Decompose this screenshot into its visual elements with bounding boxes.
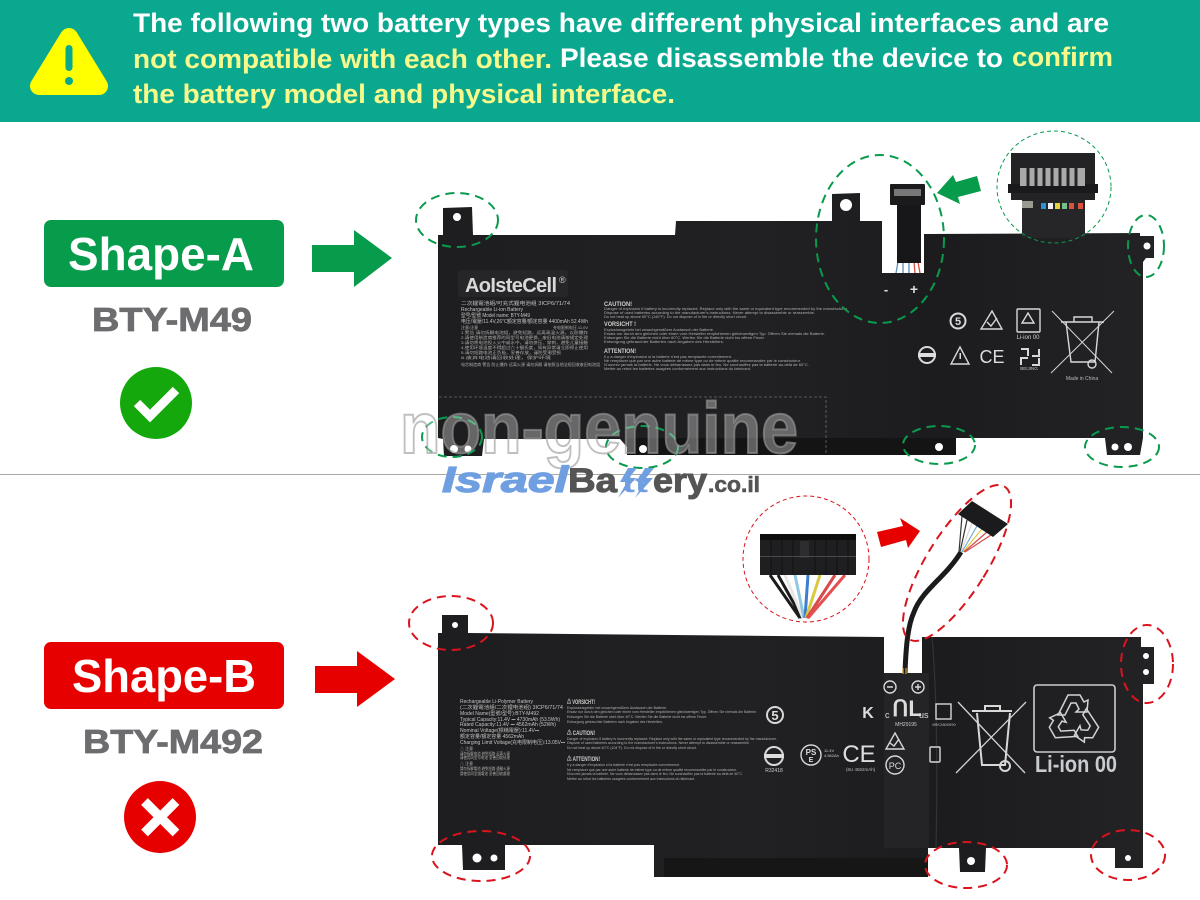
label text: safety warnings: Il y a danger d'explosion si la batterie n'est pas remplacée correctement. — [567, 762, 680, 767]
label text: specifications: Model Name(型號/型号):BTY-M492 — [460, 710, 539, 717]
panel: shape A labels — [44, 220, 392, 439]
label text: Chinese specifications: 4.使用环境温度不得超过六十摄氏度，如有异常请立即停止使用 — [461, 344, 588, 350]
label text: safety warnings: Entsorgung gebrauchter Batterien nach Angaben des Herstellers. — [567, 719, 663, 724]
label text: safety warnings: Ne remplacer que par une autre batterie de même type ou de même qualité recommandée par le constructeur. — [604, 358, 801, 363]
label text: safety warnings: Mettre au rebut les batteries usagées conformément aux instructions du fabricant. — [567, 776, 695, 781]
label text: Chinese specifications — [461, 300, 600, 367]
arrow: red pointer to connector B — [877, 518, 920, 548]
label text: Chinese specifications: 注意/注意 — [461, 324, 478, 330]
watermark: non-genuine: non-genuine — [400, 389, 798, 469]
warning text: The following two battery types have different physical interfaces and are — [133, 8, 1109, 38]
label text: specifications: 請勿拆解電池 避免短路 遠離火源 — [460, 765, 510, 771]
polarity marks: + — [910, 281, 918, 297]
label text: safety warnings: ATTENTION! — [604, 349, 636, 355]
label text: safety warnings: Ersatz nur durch den gleichen oder einen vom Hersteller empfohlenen gleichwertigen Typ. Öffnen Sie niemals die Batterie. — [567, 709, 757, 714]
label text: safety warnings: Ne remplacer que par une autre batterie de même type ou de même qualité recommandée par le constructeur. — [567, 767, 737, 772]
icon group: certification marks: PS — [806, 748, 817, 757]
arrow: green pointer to connector A — [937, 175, 981, 204]
label text: safety warnings — [567, 699, 777, 781]
label text: specifications: (二次鋰電池組/二次锂电池组) 3ICP6/71/74 — [460, 704, 563, 711]
label text: specifications: 請使用同型號電池 妥善回收處理 — [460, 770, 510, 776]
label text: specifications — [460, 699, 565, 776]
label text: safety warnings: Entsorgung gebrauchter Batterien nach Angaben des Herstellers. — [604, 339, 724, 344]
label text: safety warnings: Explosionsgefahr bei unsachgemäßem Austausch der Batterie. — [604, 327, 714, 332]
label text: specifications: 额定容量/額定容量 4562mAh — [460, 733, 524, 740]
label text: specifications: 请使用同型号电池 妥善回收处理 — [460, 754, 510, 760]
label text: safety warnings: Il y a danger d'explosion si la batterie n'est pas remplacée correctement. — [604, 354, 732, 359]
icon: warning triangle — [39, 37, 99, 86]
label text: safety warnings: VORSICHT ! — [604, 322, 636, 328]
model: BTY-M492: BTY-M492 — [83, 723, 263, 760]
icon: crossed-out recycle bin — [1051, 311, 1114, 382]
label text: specifications: Typical Capacity:11.4V ⎓ 4730mAh (53.5Wh) — [460, 717, 560, 723]
label text: safety warnings: Danger of explosion if battery is incorrectly replaced. Replace only with the same or equivalent type recommended by the manufacturer. — [604, 306, 848, 311]
label text: specifications: Rated Capacity:11.4V ⎓ 4562mAh (52Wh) — [460, 722, 556, 728]
icon group: certification marks: PC — [889, 761, 902, 771]
logo: AoisteCell: AoIsteCell — [465, 275, 557, 297]
icon group: certification marks: CE — [842, 741, 876, 768]
panel: battery A — [438, 184, 1154, 456]
divider — [0, 474, 1200, 475]
label text: safety warnings: Do not heat up above 60°C (140°F). Do not dispose of in fire or directly short circuit. — [604, 314, 747, 319]
callout: connector B close-up — [743, 496, 869, 622]
label text: Chinese specifications: 5.请勿短路电池正负极，妥善存放，谨防受潮受损 — [461, 349, 561, 355]
label text: specifications: Charging Limit Voltage(充电限制电压):13.05V⎓ — [460, 739, 565, 746]
icon: crossed-out recycle bin: Made in China — [1066, 376, 1098, 382]
label text: safety warnings: Explosionsgefahr bei unsachgemäßem Austausch der Batterie. — [567, 705, 667, 710]
label text: safety warnings: N'ouvrez jamais la batterie. Ne vous débarrassez pas dans le feu. Ne surchauffez pas la batterie au-delà de 60°C. — [604, 362, 809, 367]
label text: Chinese specifications: 电压/電壓/11.4V,26℃额定容量/额定容量 4400mAh 52.4Wh — [461, 318, 588, 325]
model: BTY-M49: BTY-M49 — [92, 301, 252, 338]
panel: battery B — [438, 615, 1154, 877]
label text: safety warnings: ⚠ VORSICHT! — [567, 699, 595, 706]
icon group: certification marks: 5 — [771, 708, 779, 723]
highlight ellipses: battery A — [416, 155, 1164, 468]
watermark: IsraelBattery.co.il: Ba — [568, 462, 618, 500]
label text: Chinese specifications: 1.警告 请勿拆解电池组，避免短路，远离高温火源，以防爆炸 — [461, 329, 588, 335]
warning text: Please disassemble the device to — [560, 43, 1003, 73]
label text: safety warnings: Entsorgen Sie die Batterie nicht über 40°C. Werfen Sie die Batterie nicht ins offene Feuer. — [567, 714, 707, 719]
label text: safety warnings: N'ouvrez jamais la batterie. Ne vous débarrassez pas dans le feu. Ne surchauffez pas la batterie au-delà de 40°C. — [567, 771, 743, 776]
badge: Shape-A: Shape-A — [68, 228, 254, 280]
label text: specifications: Rechargeable Li-Polymer Battery — [460, 699, 533, 705]
polarity marks: - — [884, 282, 888, 297]
label text: safety warnings — [604, 302, 848, 371]
label text: Chinese specifications: 电芯制造商 警告 防止爆炸 远离火源 请勿拆解 请依照当地法规回收废旧电池组 — [461, 361, 600, 367]
label text: safety warnings: ⚠ CAUTION! — [567, 730, 595, 737]
icon group: certification marks: us — [919, 710, 929, 720]
badge: Shape-B: Shape-B — [72, 650, 256, 702]
label text: Chinese specifications: 6.废弃电池请回收处理，保护环境 — [461, 354, 551, 360]
battery B body — [438, 615, 1154, 877]
label text: safety warnings: Dispose of used batteries according to the manufacturer's instructions. Never attempt to disassemble or reassemble. — [567, 740, 750, 745]
cable and connector A — [890, 184, 925, 273]
warning text — [133, 8, 1113, 109]
label text: Chinese specifications: 充电限制电压 11.0V — [553, 324, 588, 330]
icon group: certification marks: 5 — [955, 316, 961, 328]
label text: Chinese specifications: Rechargeable Li-ion Battery — [461, 307, 523, 313]
callout: connector A close-up — [997, 131, 1111, 243]
label text: safety warnings: CAUTION! — [604, 302, 632, 308]
watermark: IsraelBattery.co.il: Israel — [442, 459, 569, 500]
icon group: certification marks: (6U 4562mAh) — [846, 767, 876, 772]
icon: check mark — [120, 367, 192, 439]
icon group: certification marks: K — [862, 705, 874, 722]
icon group: certification marks: R32418 — [765, 768, 783, 774]
icon: recycling symbol box — [1034, 685, 1115, 752]
label text: safety warnings: ⚠ ATTENTION! — [567, 756, 600, 763]
badge: Shape-A — [44, 220, 284, 287]
label text: safety warnings: Dispose of used batteries according to the manufacturer's instructions. Never attempt to disassemble or reassemble. — [604, 310, 815, 315]
warning text: the battery model and physical interface. — [133, 79, 675, 109]
polarity marks — [884, 281, 918, 297]
cable and connector B — [903, 501, 1008, 674]
label text: Chinese specifications: 3.请勿将电池投入火中或水中，请勿挤压、穿刺，避免儿童接触 — [461, 339, 588, 345]
label text: specifications: Nominal Voltage(標稱電壓):11.4V⎓ — [460, 727, 539, 734]
watermark: IsraelBattery.co.il: .co.il — [708, 472, 760, 497]
label text: safety warnings: Mettre au rebut les batteries usagées conformément aux instructions du fabricant. — [604, 366, 751, 371]
watermark: IsraelBattery.co.il — [442, 459, 760, 500]
icon group: certification marks: BEIJING — [1020, 366, 1038, 371]
label text: specifications: △ 注意 — [460, 760, 473, 766]
watermark: IsraelBattery.co.il: tt — [622, 468, 648, 498]
icon group: certification marks: MH29195 — [895, 722, 917, 728]
label: Li-ion 00: Li-ion 00 — [1035, 751, 1117, 777]
label text: safety warnings: Danger of explosion if battery is incorrectly replaced. Replace only with the same or equivalent type recommended by the manufacturer. — [567, 736, 777, 741]
warning text: confirm — [1012, 42, 1113, 72]
badge: Shape-B — [44, 642, 284, 709]
icon group: certification marks — [918, 309, 1040, 371]
logo: AoisteCell — [458, 270, 568, 297]
watermark: IsraelBattery.co.il: ery — [653, 462, 707, 500]
icon group: certification marks — [764, 681, 956, 774]
label text: Chinese specifications: 型号/型號 Model name: BTY-M49 — [461, 312, 530, 319]
icon group: certification marks: E — [809, 757, 814, 764]
arrow: to battery A — [312, 230, 392, 287]
panel: shape B labels — [44, 642, 395, 853]
highlight ellipses: battery B — [409, 471, 1173, 888]
icon group: certification marks: c — [885, 710, 890, 720]
label text: specifications: △ 注意 — [460, 745, 473, 751]
icon group: certification marks: 4.562Ah — [824, 753, 839, 758]
battery A body — [438, 193, 1154, 456]
logo: AoisteCell: ® — [559, 275, 566, 285]
icon group: certification marks: 6RK2800990 — [932, 722, 956, 727]
label text: safety warnings: Entsorgen Sie die Batterie nicht über 60°C. Werfen Sie die Batterie nicht ins offene Feuer — [604, 335, 765, 340]
icon: cross mark — [124, 781, 196, 853]
label text: specifications: 请勿拆解电池 避免短路 远离火源 — [460, 750, 510, 756]
header banner — [0, 0, 1200, 122]
icon group: certification marks: CE — [979, 347, 1005, 367]
icon group: certification marks: 11.4V — [824, 748, 834, 753]
label text: Chinese specifications: 2.请使用制造商推荐的同型号电池更换，废旧电池请按规定处理 — [461, 334, 588, 340]
label text: Chinese specifications: 二次鋰電池組/可充式鋰电池组 3ICP6/71/74 — [461, 300, 570, 307]
label text: safety warnings: Do not heat up above 40°C (104°F). Do not dispose of in fire or directly short circuit. — [567, 745, 697, 750]
icon group: certification marks: ꓵL — [892, 696, 922, 721]
label text: safety warnings: Ersatz nur durch den gleichen oder einen vom Hersteller empfohlenen gleichwertigen Typ. Öffnen Sie niemals die Batterie. — [604, 331, 825, 336]
arrow: to battery B — [315, 651, 395, 707]
icon: crossed-out recycle bin — [956, 702, 1026, 773]
warning text: not compatible with each other. — [133, 44, 552, 74]
icon group: certification marks: Li-ion 00 — [1016, 335, 1040, 341]
